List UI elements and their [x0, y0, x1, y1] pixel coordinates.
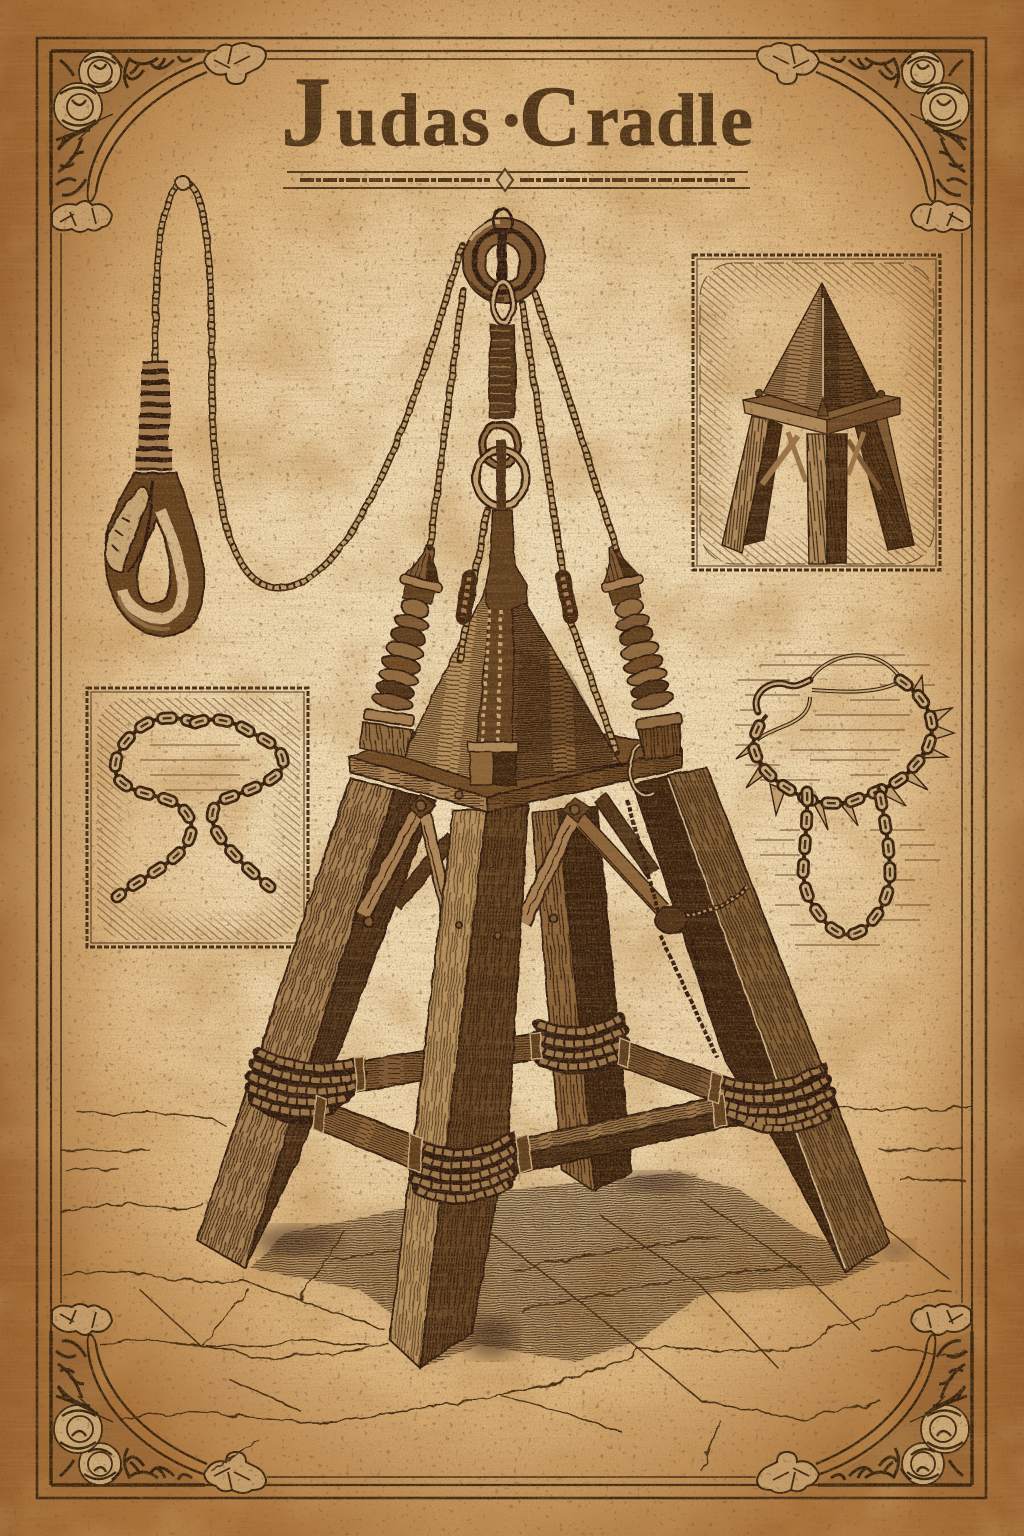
- back leg: [532, 806, 632, 1190]
- noose and rope: [104, 176, 462, 637]
- inset: chain detail: [87, 688, 308, 947]
- corner ornament: bottom left: [51, 1304, 266, 1493]
- platform: [350, 730, 682, 812]
- pyramid spire and block: [468, 510, 527, 785]
- back crossbars: [355, 1032, 730, 1104]
- title: J: [281, 56, 331, 167]
- collar wires: [757, 655, 902, 740]
- title: C: [519, 68, 581, 164]
- cracked stone floor: [58, 1105, 970, 1470]
- rope binding: left: [247, 1048, 365, 1125]
- corner ornament: top right: [757, 43, 972, 232]
- title divider: [283, 169, 750, 191]
- spikes: [736, 676, 954, 830]
- spiked collar and chain: [735, 655, 954, 945]
- ropes and chains to finials and leg: [430, 290, 747, 1057]
- inset: pyramid seat detail: [693, 255, 940, 570]
- title: udas·: [336, 80, 524, 162]
- hook: [756, 680, 810, 712]
- chain and shank: [476, 235, 526, 510]
- rope binding: right: [712, 1062, 834, 1130]
- front crossbars: [315, 1095, 735, 1175]
- corner ornament: top left: [51, 43, 266, 232]
- collar chain: [753, 680, 932, 803]
- small pyramid: [722, 283, 914, 564]
- rope: long lead to the pulley: [155, 176, 462, 588]
- rear braces: [395, 797, 653, 905]
- floor shadow: [250, 1172, 913, 1368]
- iron brackets: [313, 1032, 727, 1173]
- bolts: [364, 801, 580, 940]
- cradle: [197, 209, 890, 1368]
- front leg: [390, 805, 528, 1368]
- title: radle: [586, 80, 753, 162]
- finial: left: [360, 542, 450, 757]
- rope binding: back: [535, 1018, 628, 1075]
- rope binding: front: [412, 1130, 515, 1200]
- noose knot wrap: [136, 366, 172, 465]
- front braces: [363, 795, 663, 923]
- finial: right: [593, 542, 682, 760]
- corner ornament: bottom right: [757, 1304, 972, 1493]
- right leg: [633, 768, 890, 1272]
- left leg: [197, 778, 435, 1268]
- broken chain: [115, 718, 283, 897]
- pyramid seat: [403, 560, 620, 785]
- top pulley ring: [463, 209, 545, 303]
- noose loop: [104, 473, 204, 637]
- hanging chain: [803, 785, 890, 935]
